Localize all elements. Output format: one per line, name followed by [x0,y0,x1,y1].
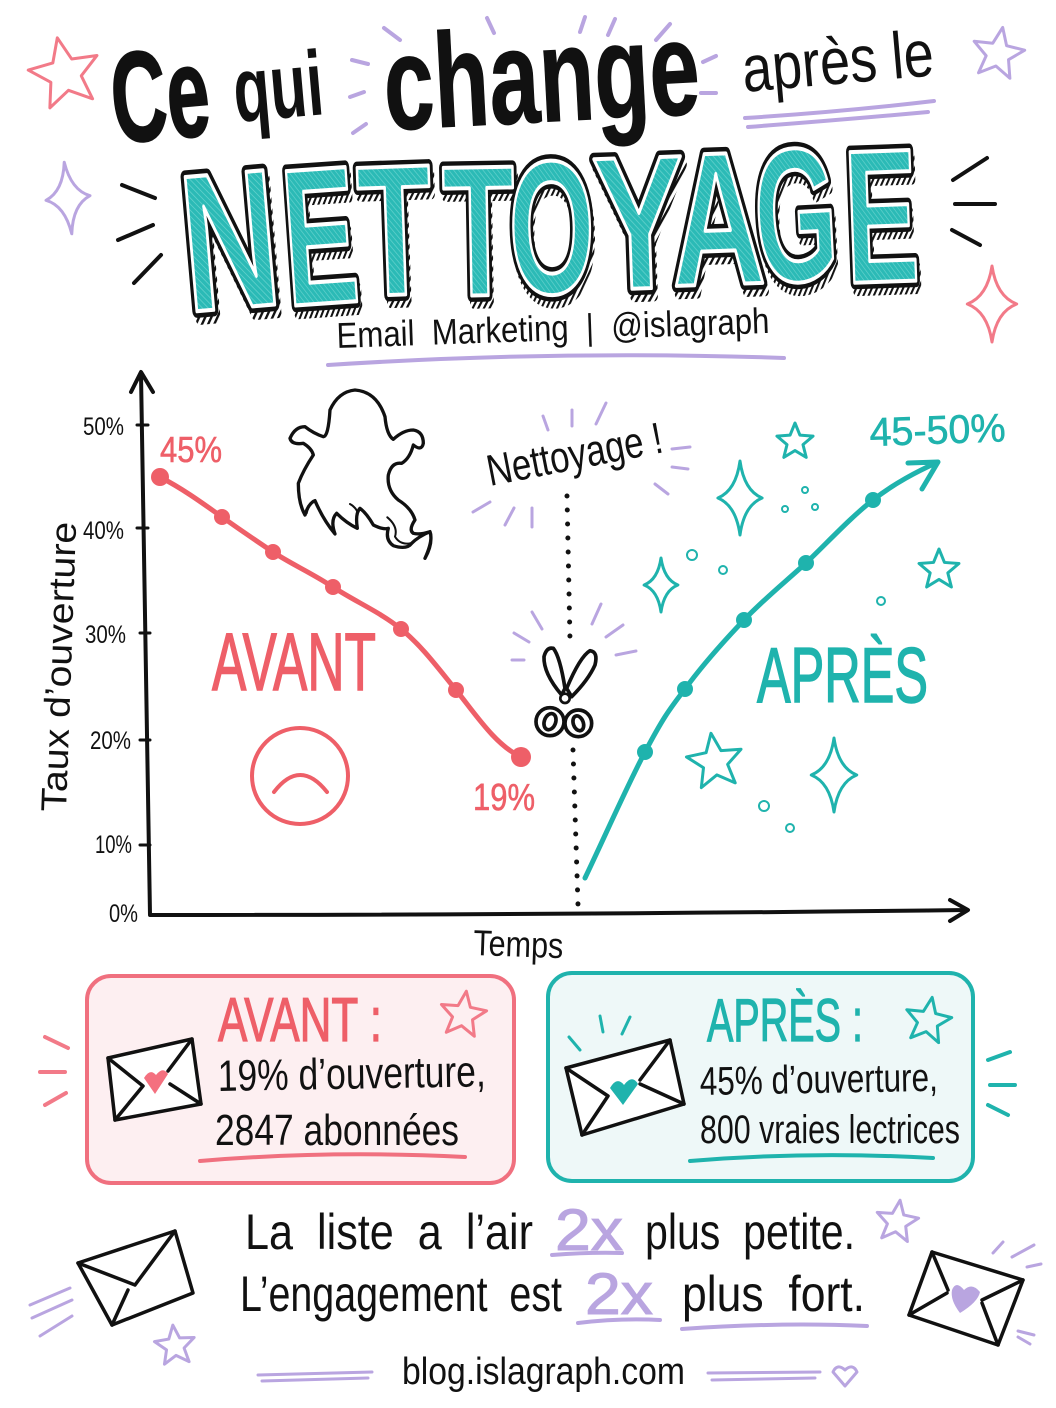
rays around Nettoyage [473,403,690,527]
icon: purple star left [153,1323,197,1365]
axis tick labels [83,413,138,928]
label 19%: 19% [473,777,535,819]
x axis title: Temps [473,922,564,966]
avant stats text: 19% d’ouverture, [217,1047,486,1101]
red line: before [151,468,531,767]
title: NETTOYAGE block letters: O [509,128,598,342]
après stats text: 45% d’ouverture, [699,1056,938,1104]
title: NETTOYAGE block letters: E [841,108,922,323]
avant heading: AVANT : [218,986,382,1055]
title: NETTOYAGE block letters: O [507,120,596,334]
avant subscribers: 2847 abonnées [215,1106,459,1155]
title: NETTOYAGE block letters: E [843,116,924,331]
axis tick labels: 20% [90,727,131,755]
heading: APRÈS: APRÈS [757,631,928,719]
icon: sad face [252,728,348,824]
conclusion text: 2x [555,1198,623,1263]
title: NETTOYAGE block letters: T [441,127,517,337]
icon: plain envelope left [78,1231,193,1325]
dotted divider [567,496,578,905]
label 45%: 45% [160,429,222,470]
axis tick labels: 50% [83,413,124,441]
title: NETTOYAGE block letters: T [441,127,517,337]
conclusion text: L’engagement est [240,1266,562,1322]
icon: pink sparkle [967,266,1017,342]
icon: ghost [290,390,431,558]
icon: pink heart envelope [108,1039,201,1120]
title: NETTOYAGE block letters: A [667,112,768,327]
axis tick labels: 40% [83,517,124,545]
conclusion text: plus petite. [645,1204,855,1260]
title: NETTOYAGE block letters: A [667,112,768,327]
icon: teal heart envelope [566,1016,684,1135]
chart axes [131,372,968,921]
title: Ce qui change après le [105,0,936,171]
footer decorations [258,1367,857,1386]
rays left of avant panel [40,1037,68,1105]
title: NETTOYAGE block letters: T [443,135,519,344]
label: Nettoyage !: Nettoyage ! [483,414,667,496]
title: Ce qui change après le: après le [739,15,936,106]
title: NETTOYAGE block letters: T [354,127,436,336]
après heading: APRÈS : [707,987,863,1054]
title rays [118,158,995,283]
icon: purple sparkle [42,160,94,236]
title: NETTOYAGE block letters: E [276,124,364,348]
icon: scissors [536,648,596,737]
conclusion text: plus fort. [682,1266,865,1322]
title: NETTOYAGE block letters: E [276,124,364,348]
panel: avant [87,976,514,1183]
footer: blog url: blog.islagraph.com [402,1351,685,1393]
teal line: after [585,462,938,878]
title: NETTOYAGE block letters [173,107,924,362]
title: NETTOYAGE block letters: A [669,120,770,335]
title: NETTOYAGE block letters: E [841,108,922,323]
title: NETTOYAGE block letters: N [173,129,287,354]
title: NETTOYAGE block letters: N [176,137,290,362]
title: NETTOYAGE block letters: T [354,127,436,336]
label 45-50%: 45-50% [869,406,1006,455]
heading: AVANT: AVANT [212,617,376,708]
envelope motion rays [30,1242,1041,1344]
conclusion text [240,1198,867,1329]
chart: open rate over time [33,372,1006,966]
icon: teal star [902,993,955,1044]
icon: pink star top left [23,31,106,111]
title: Ce qui change après le: Ce [105,20,215,171]
y axis title: Taux d’ouverture [33,521,84,812]
title decoration: purple dashes and underline [350,17,934,133]
title: NETTOYAGE block letters: G [749,107,843,324]
title: NETTOYAGE block letters: E [278,132,367,356]
axis tick labels: 30% [85,621,126,649]
rays around scissors [512,604,636,660]
panel: après [548,973,973,1181]
title: NETTOYAGE block letters: Y [590,116,689,331]
title: NETTOYAGE block letters: G [751,115,845,332]
rays right of après panel [988,1052,1015,1115]
icon: purple star top right [969,23,1028,80]
icon: purple star right [874,1197,921,1243]
icons: teal stars and sparkles [644,423,959,832]
title: NETTOYAGE block letters: T [356,134,438,344]
après subscribers: 800 vraies lectrices [700,1108,960,1152]
title: NETTOYAGE block letters: O [507,120,596,334]
axis tick labels: 10% [95,831,132,859]
conclusion text: La liste a l’air [245,1204,533,1260]
icon: pink star [438,988,489,1037]
subtitle: Email Marketing | @islagraph: Email Marketing | @islagraph [336,300,770,356]
title: NETTOYAGE block letters: Y [592,124,691,339]
icon: purple heart envelope right [909,1252,1023,1345]
axis tick labels: 0% [109,900,138,928]
title: Ce qui change après le: qui [229,32,327,142]
title: NETTOYAGE block letters: G [749,107,843,324]
conclusion text: 2x [585,1262,653,1327]
title: NETTOYAGE block letters: N [173,129,287,354]
title: NETTOYAGE block letters: Y [590,116,689,331]
